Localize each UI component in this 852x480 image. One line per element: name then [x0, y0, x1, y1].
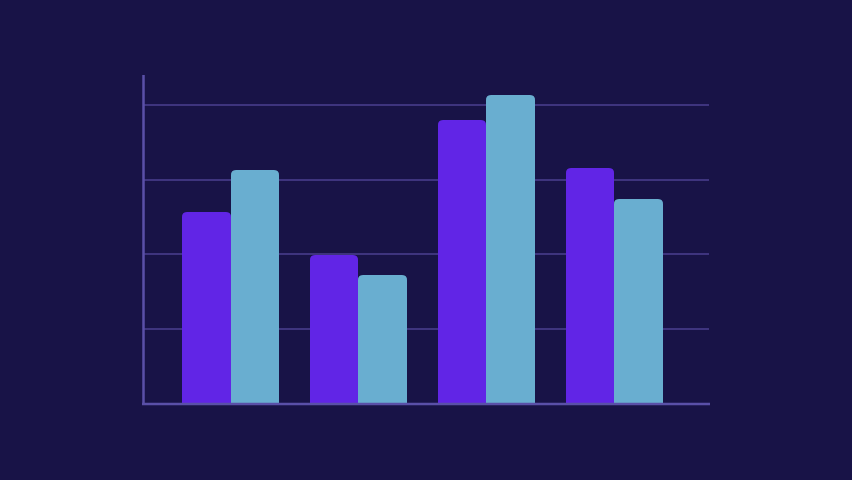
group 2 bars: [310, 255, 407, 404]
group 1 bars: [182, 170, 279, 404]
group 4 bars: [566, 168, 663, 404]
axes: [142, 75, 710, 405]
group 3 bars: [438, 95, 535, 404]
